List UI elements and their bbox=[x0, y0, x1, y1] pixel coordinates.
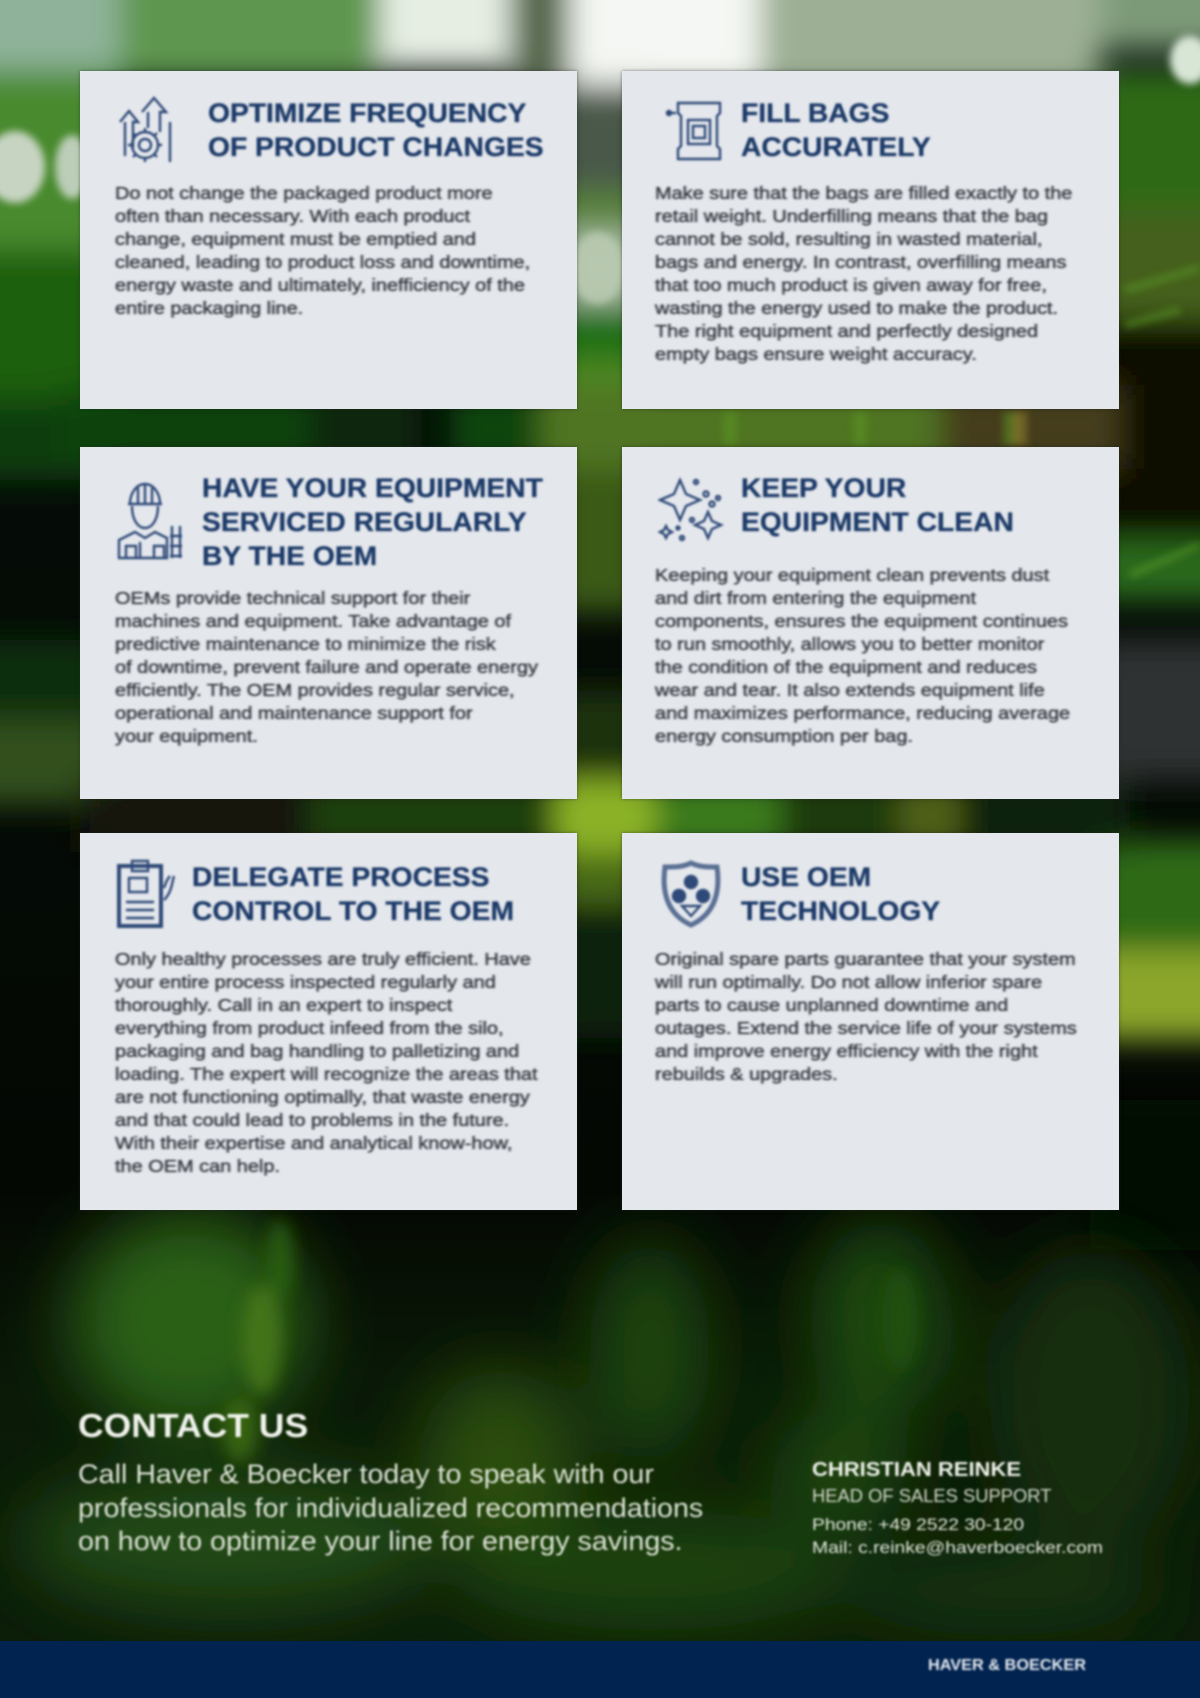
panel: optimize frequency of product changes bbox=[80, 71, 577, 409]
icon: clipboard checklist bbox=[115, 858, 176, 930]
text: OEM technology body: will run optimally. Do not allow inferior spare bbox=[655, 972, 1042, 992]
text: clean body: and dirt from entering the equipment bbox=[655, 588, 976, 608]
text: contact person bbox=[811, 1459, 1104, 1558]
panel: have your equipment serviced regularly bbox=[80, 447, 577, 799]
heading: fill bags bbox=[740, 98, 932, 162]
heading: fill bags: FILL BAGS bbox=[741, 98, 889, 128]
text: clean body: energy consumption per bag. bbox=[655, 726, 913, 746]
text: delegate body: Only healthy processes are truly efficient. Have bbox=[115, 949, 531, 969]
heading: delegate process control: CONTROL TO THE OEM bbox=[192, 896, 514, 926]
text: service body: operational and maintenance support for bbox=[115, 703, 473, 723]
text: OEM technology body bbox=[653, 949, 1078, 1086]
text: fill bags body: bags and energy. In contrast, overfilling means bbox=[655, 252, 1066, 272]
text: contact paragraph: on how to optimize your line for energy savings. bbox=[78, 1526, 683, 1556]
text: OEM technology body: rebuilds & upgrades. bbox=[655, 1064, 838, 1084]
text: clean body: Keeping your equipment clean prevents dust bbox=[655, 565, 1049, 585]
text: optimize frequency body: entire packaging line. bbox=[115, 298, 303, 318]
moss streaks bbox=[1125, 268, 1200, 575]
heading: optimize frequency bbox=[207, 98, 544, 162]
icon: gear with arrows bbox=[118, 95, 173, 164]
heading: contact us: CONTACT US bbox=[78, 1407, 308, 1444]
text: fill bags body: cannot be sold, resulting in wasted material, bbox=[655, 229, 1042, 249]
text: contact person: HEAD OF SALES SUPPORT bbox=[812, 1486, 1051, 1506]
text: delegate body: everything from product infeed from the silo, bbox=[115, 1018, 504, 1038]
right strip bbox=[1090, 70, 1200, 210]
text: optimize frequency body: cleaned, leading to product loss and downtime, bbox=[115, 252, 530, 272]
row gap 1 bbox=[60, 390, 310, 466]
text: optimize frequency body bbox=[114, 183, 530, 320]
heading: optimize frequency: OF PRODUCT CHANGES bbox=[208, 132, 544, 162]
footer bar bbox=[0, 1641, 1200, 1698]
text: service body: predictive maintenance to minimize the risk bbox=[115, 634, 496, 654]
heading: have your equipment serviced: HAVE YOUR EQUIPMENT bbox=[202, 473, 543, 503]
heading: optimize frequency: OPTIMIZE FREQUENCY bbox=[208, 98, 526, 128]
text: fill bags body: wasting the energy used to make the product. bbox=[655, 298, 1058, 318]
text: contact paragraph: professionals for individualized recommendations bbox=[78, 1492, 703, 1522]
text: service body: efficiently. The OEM provides regular service, bbox=[115, 680, 515, 700]
text: contact person: CHRISTIAN REINKE bbox=[812, 1459, 1021, 1481]
text: service body: of downtime, prevent failure and operate energy bbox=[115, 657, 538, 677]
text: fill bags body: The right equipment and perfectly designed bbox=[655, 321, 1038, 341]
top band bbox=[0, 0, 120, 70]
heading: have your equipment serviced: BY THE OEM bbox=[202, 541, 377, 571]
text: contact paragraph: Call Haver & Boecker today to speak with our bbox=[78, 1459, 654, 1489]
text: service body bbox=[113, 588, 540, 748]
text: clean body: the condition of the equipment and reduces bbox=[655, 657, 1037, 677]
text: delegate body: loading. The expert will recognize the areas that bbox=[115, 1064, 538, 1084]
heading: use OEM technology bbox=[740, 862, 941, 926]
text: fill bags body: that too much product is given away for free, bbox=[655, 275, 1047, 295]
text: optimize frequency body: change, equipment must be emptied and bbox=[115, 229, 476, 249]
icon: filled bag bbox=[664, 100, 723, 162]
heading: use OEM technology: USE OEM bbox=[741, 862, 871, 892]
text: clean body bbox=[653, 565, 1072, 748]
text: contact person: Mail: c.reinke@haverboecker.com bbox=[812, 1538, 1103, 1557]
text: service body: your equipment. bbox=[115, 726, 258, 746]
text: clean body: components, ensures the equipment continues bbox=[655, 611, 1068, 631]
text: OEM technology body: outages. Extend the service life of your systems bbox=[655, 1018, 1077, 1038]
text: delegate body: the OEM can help. bbox=[115, 1156, 280, 1176]
heading: delegate process control bbox=[191, 862, 514, 926]
text: delegate body: and that could lead to problems in the future. bbox=[115, 1110, 509, 1130]
text: delegate body: thoroughly. Call in an expert to inspect bbox=[115, 995, 452, 1015]
text: OEM technology body: Original spare parts guarantee that your system bbox=[655, 949, 1076, 969]
heading: keep equipment clean: KEEP YOUR bbox=[741, 473, 906, 503]
text: optimize frequency body: Do not change the packaged product more bbox=[115, 183, 493, 203]
icon: service technician bbox=[116, 481, 184, 561]
heading: have your equipment serviced: SERVICED REGULARLY bbox=[202, 507, 527, 537]
text: delegate body: are not functioning optimally, that waste energy bbox=[115, 1087, 530, 1107]
heading: keep equipment clean bbox=[741, 473, 1014, 538]
text: fill bags body: empty bags ensure weight accuracy. bbox=[655, 344, 977, 364]
heading: have your equipment serviced bbox=[201, 473, 544, 571]
heading: delegate process control: DELEGATE PROCESS bbox=[192, 862, 489, 892]
centre strip bbox=[555, 85, 645, 190]
row gap 2 bbox=[80, 780, 310, 852]
bokeh bbox=[0, 131, 45, 203]
text: clean body: and maximizes performance, reducing average bbox=[655, 703, 1070, 723]
panel: use OEM technology bbox=[622, 833, 1119, 1210]
text: contact paragraph bbox=[78, 1459, 704, 1558]
text: delegate body: With their expertise and analytical know-how, bbox=[115, 1133, 512, 1153]
text: optimize frequency body: energy waste and ultimately, inefficiency of the bbox=[115, 275, 525, 295]
text: delegate body bbox=[113, 949, 540, 1177]
text: fill bags body bbox=[653, 183, 1074, 366]
panel: fill bags accurately bbox=[622, 71, 1119, 409]
icon: shield with parts bbox=[660, 859, 722, 929]
heading: keep equipment clean: EQUIPMENT CLEAN bbox=[741, 507, 1014, 537]
text: clean body: wear and tear. It also extends equipment life bbox=[655, 680, 1045, 700]
text: delegate body: your entire process inspected regularly and bbox=[115, 972, 496, 992]
left strip bbox=[0, 70, 120, 250]
text: service body: machines and equipment. Take advantage of bbox=[115, 611, 511, 631]
text: fill bags body: Make sure that the bags are filled exactly to the bbox=[655, 183, 1072, 203]
footer logo text: HAVER & BOECKER bbox=[928, 1657, 1086, 1674]
text: service body: OEMs provide technical support for their bbox=[115, 588, 470, 608]
text: fill bags body: retail weight. Underfilling means that the bag bbox=[655, 206, 1048, 226]
heading: use OEM technology: TECHNOLOGY bbox=[741, 896, 940, 926]
text: delegate body: packaging and bag handling to palletizing and bbox=[115, 1041, 519, 1061]
panel: delegate process control bbox=[80, 833, 577, 1210]
text: contact person: Phone: +49 2522 30-120 bbox=[812, 1515, 1024, 1534]
text: OEM technology body: parts to cause unplanned downtime and bbox=[655, 995, 1008, 1015]
heading: fill bags: ACCURATELY bbox=[741, 132, 931, 162]
text: optimize frequency body: often than necessary. With each product bbox=[115, 206, 470, 226]
text: OEM technology body: and improve energy efficiency with the right bbox=[655, 1041, 1038, 1061]
text: clean body: to run smoothly, allows you to better monitor bbox=[655, 634, 1044, 654]
icon: sparkles bbox=[656, 476, 724, 543]
panel: keep your equipment clean bbox=[622, 447, 1119, 799]
